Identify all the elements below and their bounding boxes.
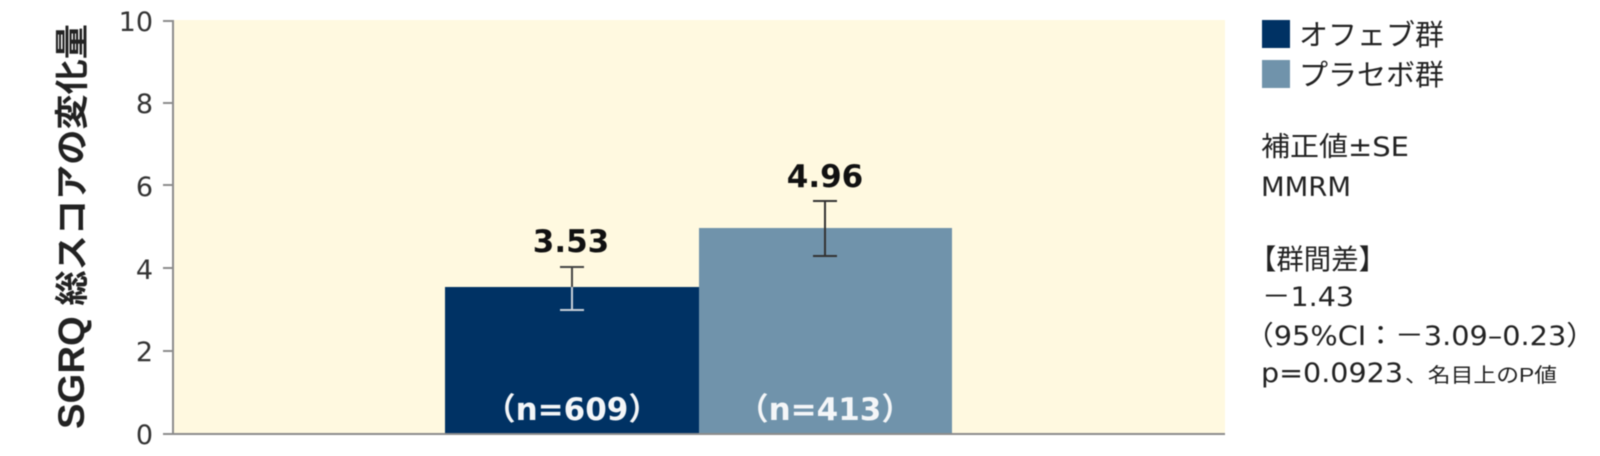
- note: 補正値±SE: 補正値±SE: [1261, 132, 1409, 163]
- plot background: [173, 20, 1225, 433]
- y axis title: SGRQ 総スコアの変化量: [51, 24, 92, 429]
- value label 4.96: 4.96: [787, 159, 863, 195]
- bar: オフェブ群: [445, 287, 699, 433]
- y axis: 8: [136, 89, 153, 120]
- heading: 群間差: 【群間差】: [1249, 244, 1386, 275]
- notes: [1245, 132, 1595, 389]
- legend: [1262, 19, 1444, 92]
- y axis: 0: [136, 420, 153, 451]
- confidence interval: （95%CI：－3.09–0.23）: [1245, 321, 1595, 352]
- legend swatch: プラセボ群: [1262, 60, 1290, 88]
- legend label: オフェブ群: オフェブ群: [1299, 19, 1444, 52]
- bar sample size: （n=609）: [485, 392, 659, 428]
- p value note: 、名目上のP値: [1405, 364, 1557, 387]
- y axis: 2: [136, 337, 153, 368]
- p value: p=0.0923: [1261, 358, 1403, 389]
- y axis: [119, 7, 1225, 451]
- y axis: 4: [136, 255, 153, 286]
- y axis: 10: [119, 7, 153, 38]
- y axis: 6: [136, 172, 153, 203]
- legend label: プラセボ群: プラセボ群: [1299, 59, 1444, 92]
- value label 3.53: 3.53: [533, 224, 609, 260]
- error bar: プラセボ群: [813, 201, 837, 256]
- legend swatch: オフェブ群: [1262, 20, 1290, 48]
- error bar: オフェブ群: [560, 267, 584, 310]
- bar: プラセボ群: [699, 228, 952, 433]
- bar sample size: （n=413）: [738, 392, 912, 428]
- group difference: －1.43: [1262, 282, 1354, 313]
- note: MMRM: MMRM: [1261, 172, 1351, 203]
